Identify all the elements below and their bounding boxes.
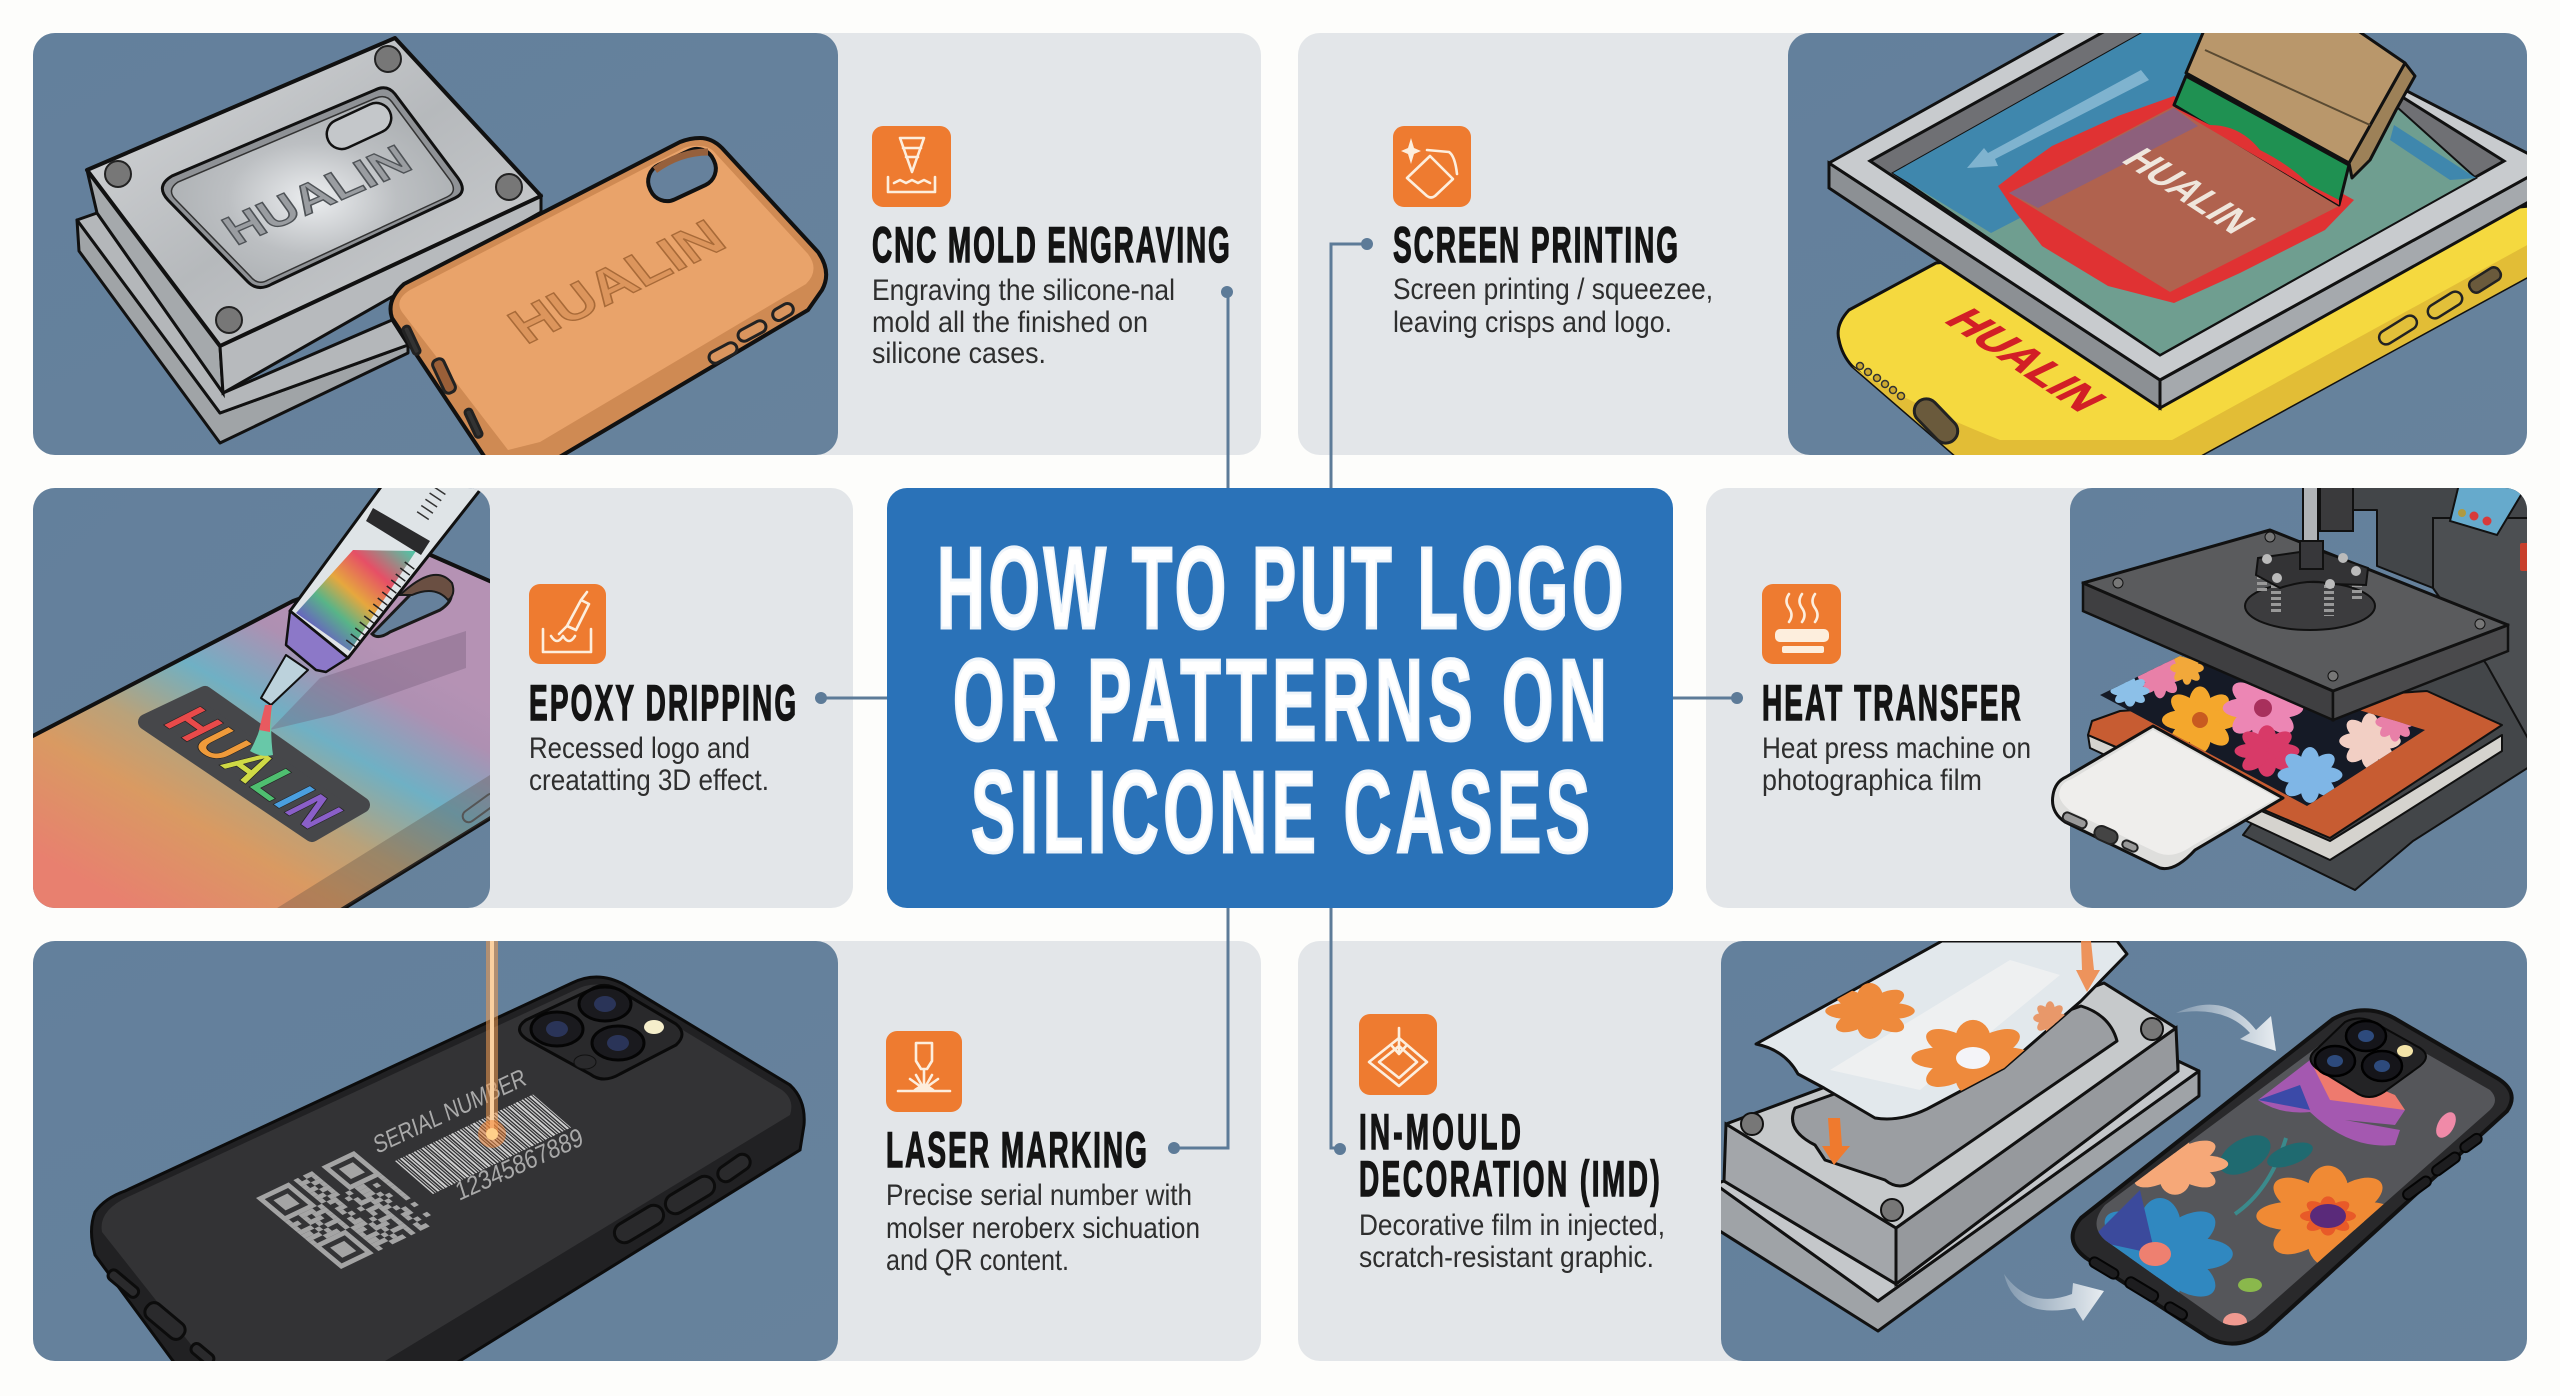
- rainbow logo: HUALIN: [149, 699, 358, 837]
- icon: CNC engraving: [872, 126, 951, 207]
- serial digits: 12345867889: [452, 1123, 587, 1207]
- description: [1359, 1209, 1665, 1274]
- illustration: screen frame and squeegee over yellow case: [1788, 20, 2550, 470]
- title text: OR PATTERNS ON: [953, 637, 1607, 766]
- press body: [2243, 480, 2540, 890]
- description: Heat press machine on: [1762, 732, 2031, 765]
- panel: heat transfer: [1706, 480, 2540, 908]
- camera cutout: [372, 584, 451, 637]
- floral phone case: [2073, 1010, 2512, 1344]
- printed logo: HUALIN: [2112, 142, 2266, 239]
- heading: [1359, 1103, 1660, 1207]
- illustration: heat press with floral film: [2070, 480, 2540, 908]
- description: Engraving the silicone-nal: [872, 274, 1175, 307]
- film sheet: [1756, 941, 2127, 1119]
- description: creatatting 3D effect.: [529, 764, 769, 797]
- title text: [937, 525, 1623, 878]
- curved arrows: [2176, 1005, 2276, 1051]
- heading: EPOXY DRIPPING: [529, 674, 796, 731]
- orange case: [390, 138, 826, 465]
- heading: IN-MOULD: [1359, 1103, 1521, 1160]
- icon: screen printing: [1393, 126, 1471, 207]
- panel: epoxy dripping: [25, 480, 853, 915]
- heading: SCREEN PRINTING: [1393, 216, 1678, 273]
- description: and QR content.: [886, 1244, 1069, 1277]
- QR code: [258, 1153, 437, 1267]
- description: Decorative film in injected,: [1359, 1209, 1665, 1242]
- camera block: [519, 985, 682, 1079]
- direction arrow: [1967, 70, 2149, 168]
- description: Screen printing / squeezee,: [1393, 273, 1713, 306]
- description: [886, 1179, 1200, 1277]
- laser beam: [478, 941, 506, 1148]
- heading: HEAT TRANSFER: [1762, 674, 2021, 731]
- title text: HOW TO PUT LOGO: [937, 525, 1623, 654]
- description: leaving crisps and logo.: [1393, 306, 1672, 339]
- description: [529, 732, 769, 797]
- printed red logo on case: HUALIN: [1934, 303, 2118, 417]
- illustration: engraved mold and orange case: [33, 33, 838, 465]
- heading: DECORATION (IMD): [1359, 1150, 1660, 1207]
- syringe: [261, 480, 488, 705]
- description: scratch-resistant graphic.: [1359, 1241, 1654, 1274]
- white case: [2052, 726, 2283, 869]
- illustration: black case with laser beam: [33, 941, 838, 1380]
- mold base and block: [1715, 1071, 2199, 1331]
- icon: in-mould: [1359, 1014, 1437, 1095]
- yellow case: [1838, 205, 2540, 470]
- panel: laser marking: [33, 941, 1261, 1380]
- description: photographica film: [1762, 764, 1982, 797]
- icon: heat press: [1762, 584, 1841, 664]
- icon: epoxy syringe: [529, 584, 606, 664]
- serial number text: SERIAL NUMBER: [370, 1063, 529, 1160]
- description: Precise serial number with: [886, 1179, 1192, 1212]
- heading: CNC MOLD ENGRAVING: [872, 216, 1230, 273]
- description: molser neroberx sichuation: [886, 1212, 1200, 1245]
- panel: screen printing: [1298, 20, 2550, 470]
- panel: in-mould decoration: [1298, 941, 2527, 1361]
- heading: LASER MARKING: [886, 1121, 1147, 1178]
- description: [872, 274, 1175, 370]
- description: [1393, 273, 1713, 339]
- panel: CNC mold engraving: [33, 33, 1261, 465]
- connector lines: [815, 238, 1743, 1155]
- recessed logo tray: [146, 694, 362, 834]
- description: mold all the finished on: [872, 306, 1148, 339]
- barcode: [414, 1110, 553, 1178]
- red ink: [1998, 96, 2354, 303]
- icon: laser: [886, 1031, 962, 1112]
- illustration: syringe dripping rainbow epoxy: [25, 480, 510, 915]
- description: [1762, 732, 2031, 797]
- engraved logo on mold: HUALIN: [213, 137, 421, 254]
- panel: central title: [887, 488, 1673, 908]
- floral film: [2090, 650, 2435, 815]
- title text: SILICONE CASES: [971, 749, 1590, 878]
- description: Recessed logo and: [529, 732, 750, 765]
- logo on orange case: HUALIN: [497, 209, 736, 354]
- description: silicone cases.: [872, 337, 1046, 370]
- illustration: film over mold and floral case: [1715, 941, 2527, 1361]
